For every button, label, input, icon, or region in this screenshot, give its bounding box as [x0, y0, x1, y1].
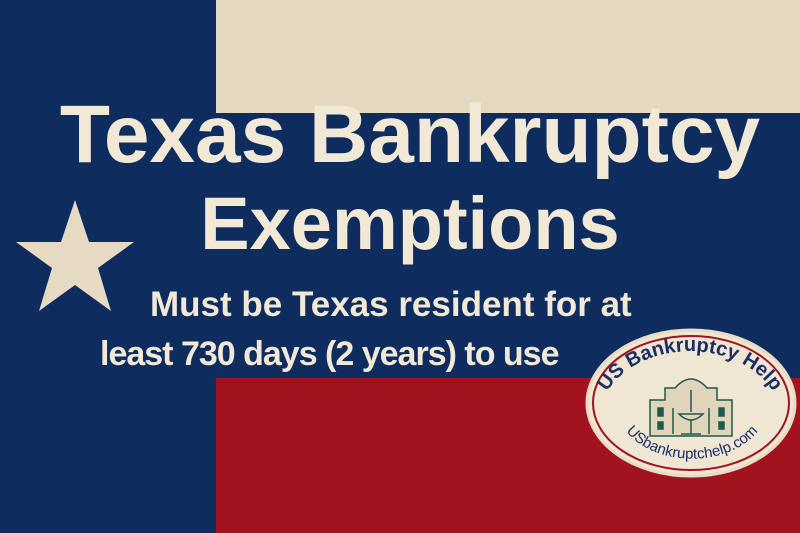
subtitle: least 730 days (2 years) to use	[100, 335, 558, 373]
subtitle: Must be Texas resident for at	[150, 285, 632, 324]
title: Exemptions	[200, 182, 620, 265]
panel: cream top band	[216, 0, 800, 113]
icon: alamo	[650, 379, 732, 436]
subtitle	[100, 285, 632, 373]
title	[60, 89, 760, 265]
title: Texas Bankruptcy	[60, 89, 760, 180]
panel: red bottom band	[216, 378, 800, 533]
logo badge	[586, 328, 796, 478]
logo badge: USbankruptchelp.com	[628, 425, 758, 462]
icon: star	[16, 200, 134, 311]
logo badge: US Bankruptcy Help	[596, 338, 780, 390]
